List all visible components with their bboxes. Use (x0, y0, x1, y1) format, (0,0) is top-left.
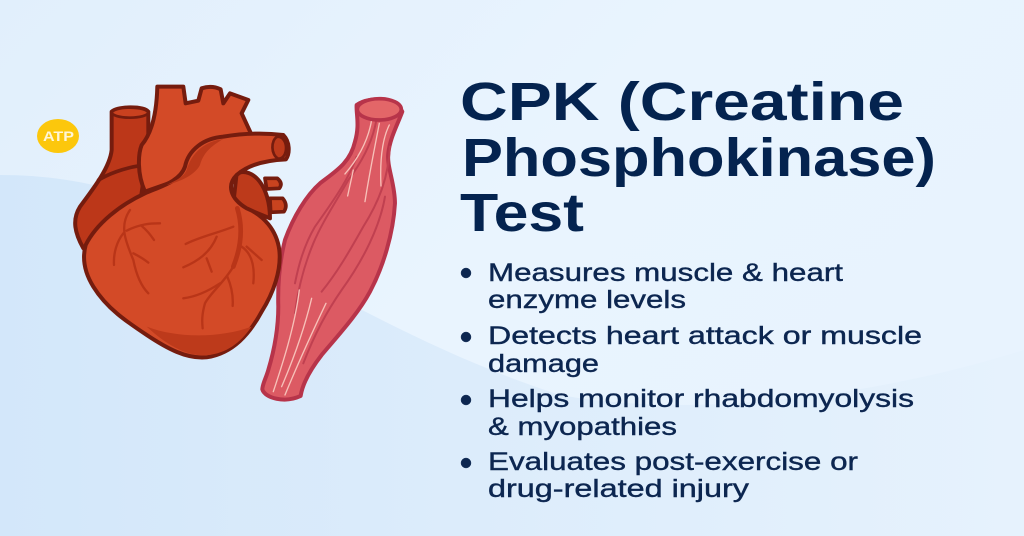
bullet 1: enzyme levels (488, 286, 686, 314)
bullet 3: & myopathies (488, 413, 677, 441)
title (460, 72, 936, 243)
bullet 2: Detects heart attack or muscle (488, 322, 922, 350)
badge: ATP: ATP (43, 128, 74, 144)
bullet 1 (461, 259, 843, 314)
bullet 4: drug-related injury (488, 475, 750, 503)
title: Phosphokinase) (462, 128, 936, 188)
vessels right (265, 178, 286, 212)
bullet 3: Helps monitor rhabdomyolysis (488, 385, 914, 413)
bullet 2: damage (488, 350, 599, 378)
bullet 2 (461, 322, 922, 378)
coronary vessels (114, 210, 160, 293)
right atrium seam (99, 166, 138, 180)
title: Test (460, 183, 584, 243)
bullet 3 (461, 385, 914, 441)
bullet 1: Measures muscle & heart (488, 259, 843, 287)
lower shading (147, 327, 252, 355)
bullet 4: Evaluates post-exercise or (488, 448, 858, 476)
heart body (84, 134, 289, 358)
icon: muscle (262, 99, 402, 399)
left atrium (233, 172, 270, 218)
bullet 4 (461, 448, 858, 503)
title: CPK (Creatine (460, 72, 904, 132)
aorta opening (272, 137, 286, 159)
icon: heart (75, 87, 289, 358)
vena cava and right atrium (75, 107, 148, 248)
bullet list (461, 259, 922, 503)
aortic arch (139, 87, 252, 192)
pulmonary shading (167, 139, 223, 185)
badge: ATP (37, 119, 79, 153)
